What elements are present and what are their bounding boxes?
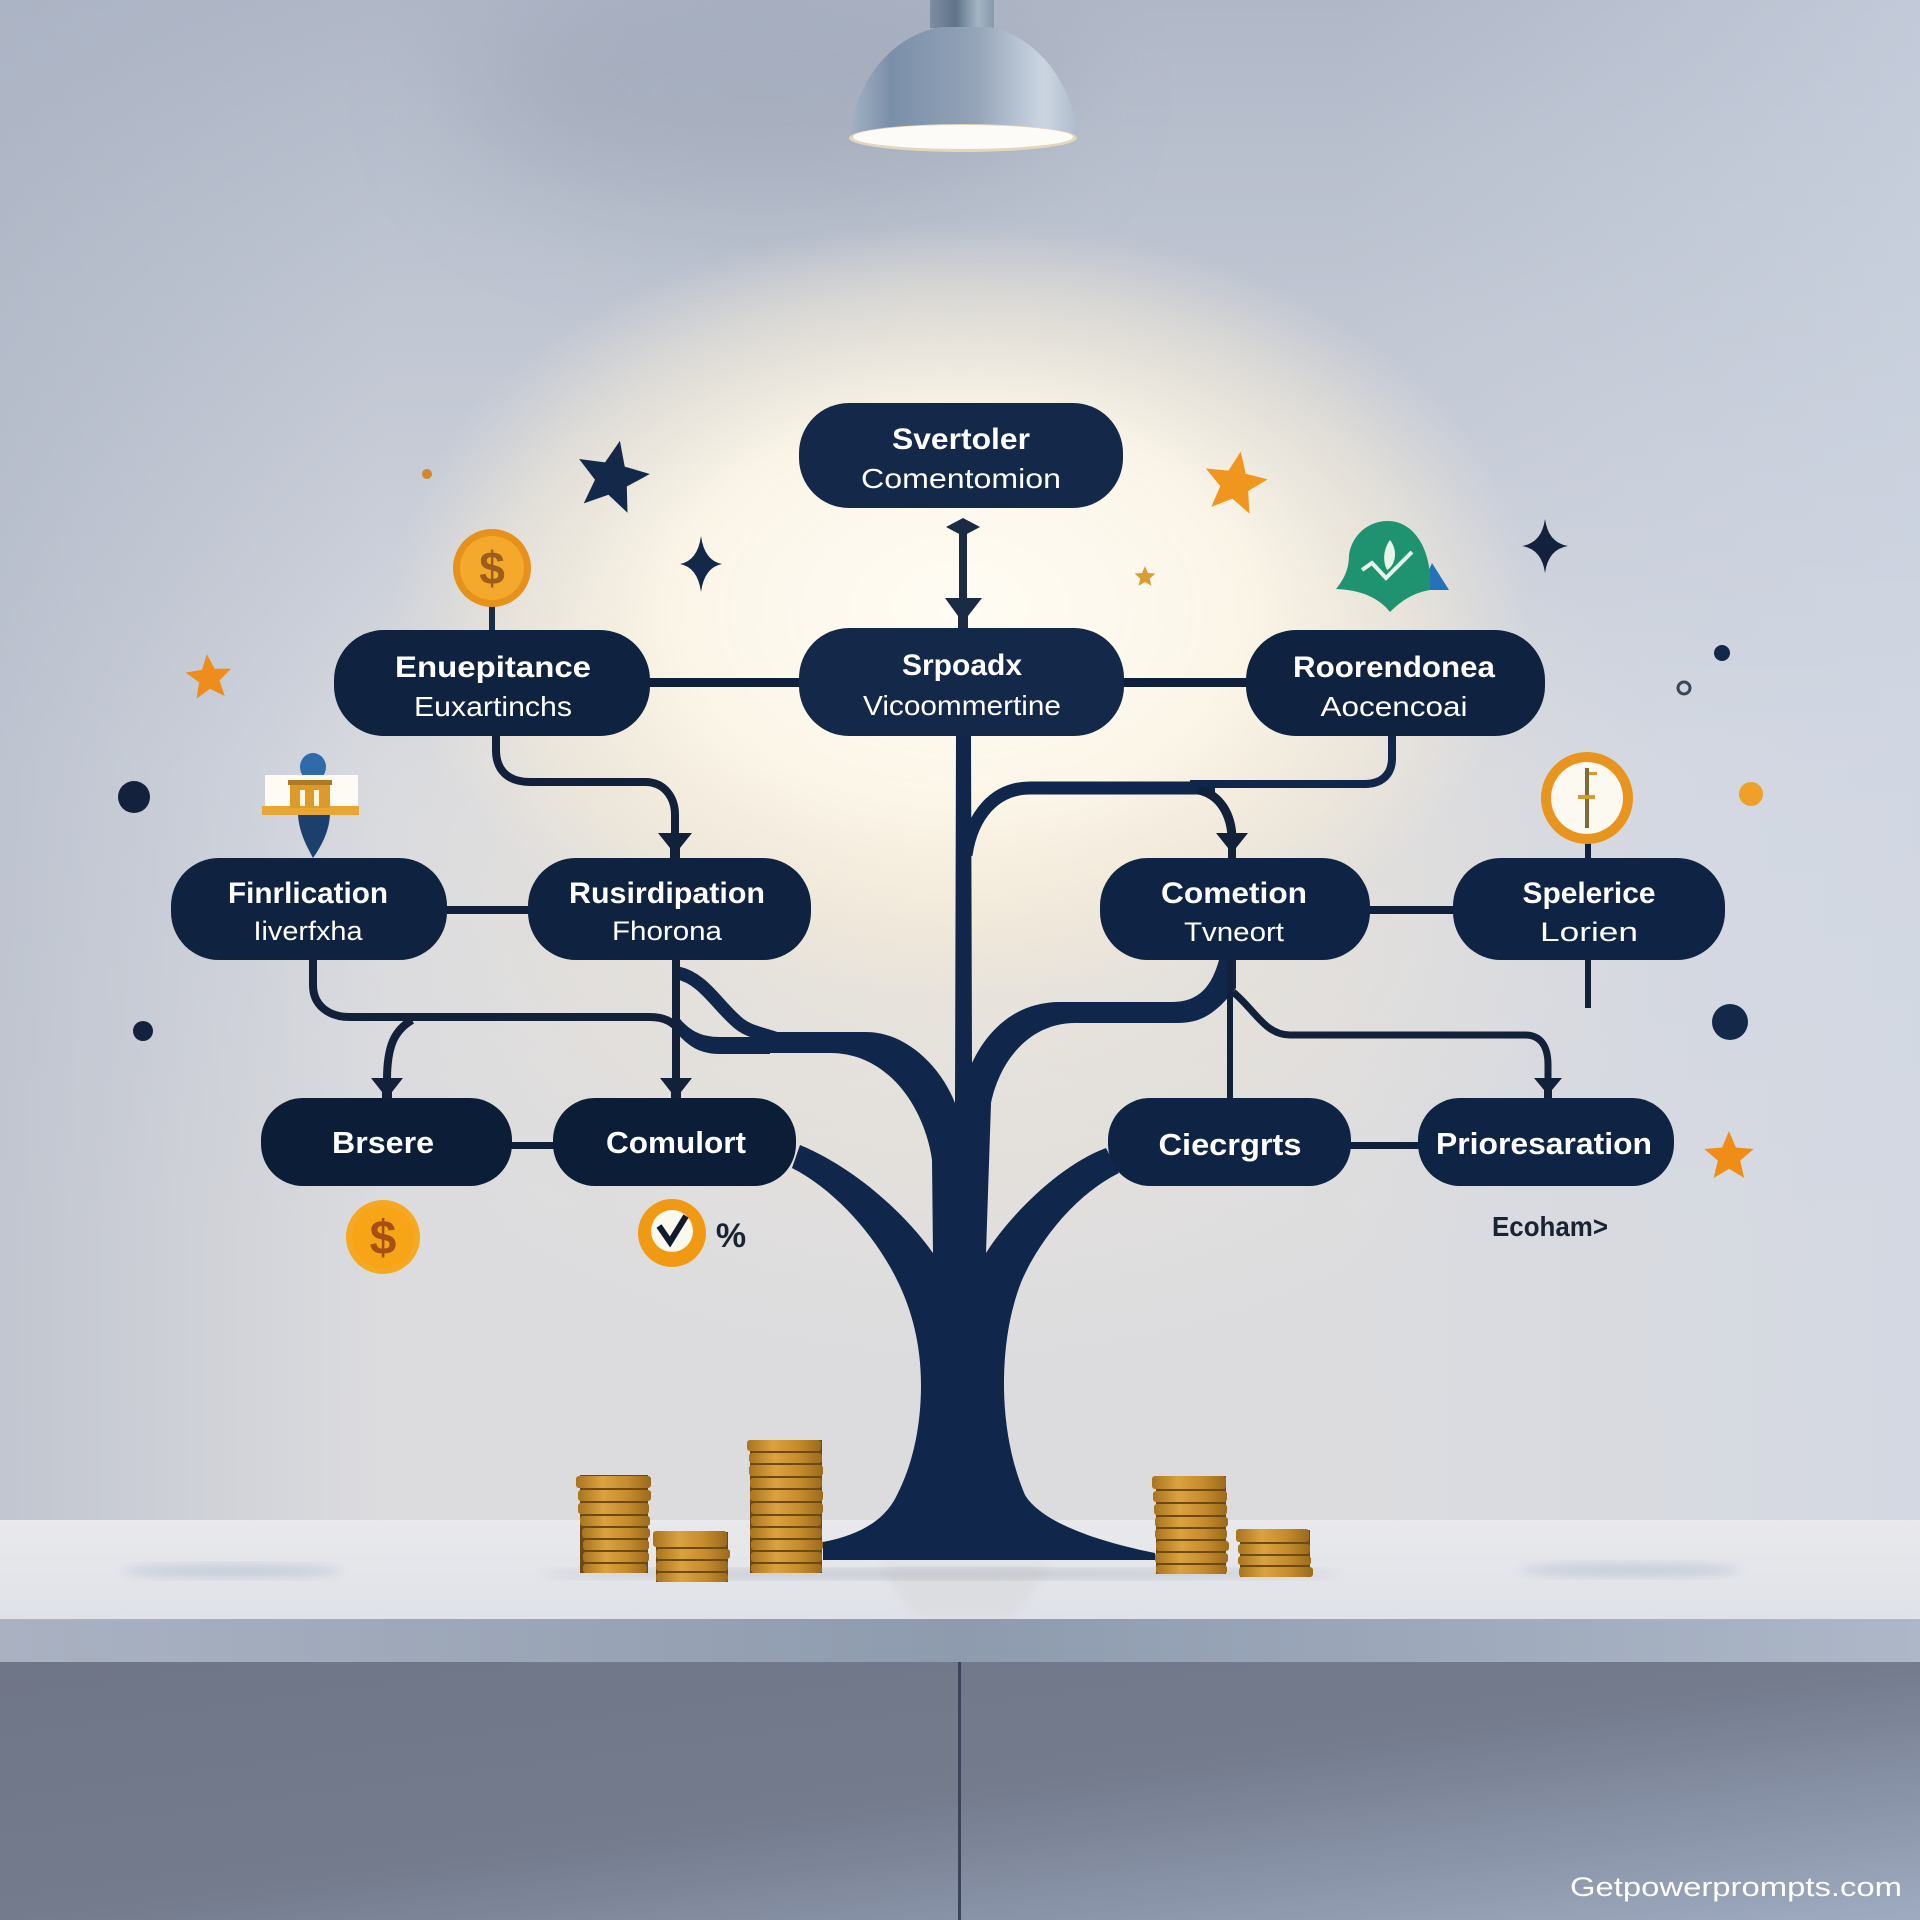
node: ciecrgrts [1108,1098,1351,1186]
node: prioresaration: Prioresaration [1436,1126,1652,1161]
node: rusirdipation: Fhorona [612,916,723,946]
icon: dollar coin lower: $ [370,1212,397,1265]
node: brsere: Brsere [332,1125,434,1160]
node: center: Vicoommertine [863,690,1061,721]
connector: comotion node to lower row arrow [1227,960,1562,1100]
counter and cabinet [0,1520,1920,1920]
node: finrlication [171,858,447,960]
connector: finance node to lower row arrows [313,960,692,1098]
icon: clock badge [1541,752,1633,844]
node: comulort [553,1098,796,1186]
connector: level two horizontal links [648,678,1248,687]
tree silhouette [672,736,1236,1560]
node: left [334,630,650,736]
node: cometion: Cometion [1161,877,1307,910]
connector: level three horizontal links [445,906,1455,914]
node: right: Roorendonea [1293,651,1495,684]
node: left: Enuepitance [395,651,591,684]
node: left: Euxartinchs [414,691,572,722]
percent mark: % [716,1217,746,1255]
icon: dollar coin lower [346,1200,420,1274]
node: center: Srpoadx [902,649,1022,682]
icon: bank pin [262,753,359,858]
node: comulort: Comulort [606,1125,746,1160]
node: finrlication: Iiverfxha [254,916,364,946]
node: spelerice: Lorien [1540,917,1638,947]
node: top: Svertoler [892,423,1030,456]
node: right: Aocencoai [1320,691,1468,722]
node: spelerice: Spelerice [1522,877,1656,910]
coin stack 4 [1152,1476,1229,1574]
watermark: Getpowerprompts.com [1570,1872,1902,1902]
coin stack 1 [576,1475,651,1573]
coin stacks [540,1440,1340,1582]
node: ciecrgrts: Ciecrgrts [1158,1127,1302,1162]
connector: spelerice node vertical lines [1585,842,1591,1008]
icon: dollar coin upper: $ [479,542,505,594]
node: top: Comentomion [861,463,1061,494]
icon: dollar coin upper [453,529,531,630]
connector: level four horizontal links [510,1142,1420,1149]
decorative stars and dots [118,433,1763,1178]
node: prioresaration [1418,1098,1674,1186]
node: spelerice [1453,858,1725,960]
node: top [799,403,1123,508]
node: cometion [1100,858,1370,960]
small label: Ecoham> [1492,1211,1608,1242]
icon: green pin badge [1336,521,1449,612]
ceiling lamp [849,0,1078,152]
node: center [799,628,1124,736]
connector: left node to participation arrow [496,736,692,858]
coin stack 5 [1236,1529,1313,1577]
connector: root to center arrow [945,518,982,630]
connector: right node to central stem and arrow [966,736,1392,858]
node: rusirdipation [528,858,811,960]
node: brsere [261,1098,512,1186]
node: right [1246,630,1545,736]
coin stack 3 [747,1440,823,1573]
node: cometion: Tvneort [1184,917,1285,947]
coin stack 2 [653,1531,730,1582]
icon: check badge [638,1199,706,1267]
node: finrlication: Finrlication [228,877,388,910]
node: rusirdipation: Rusirdipation [569,877,765,910]
